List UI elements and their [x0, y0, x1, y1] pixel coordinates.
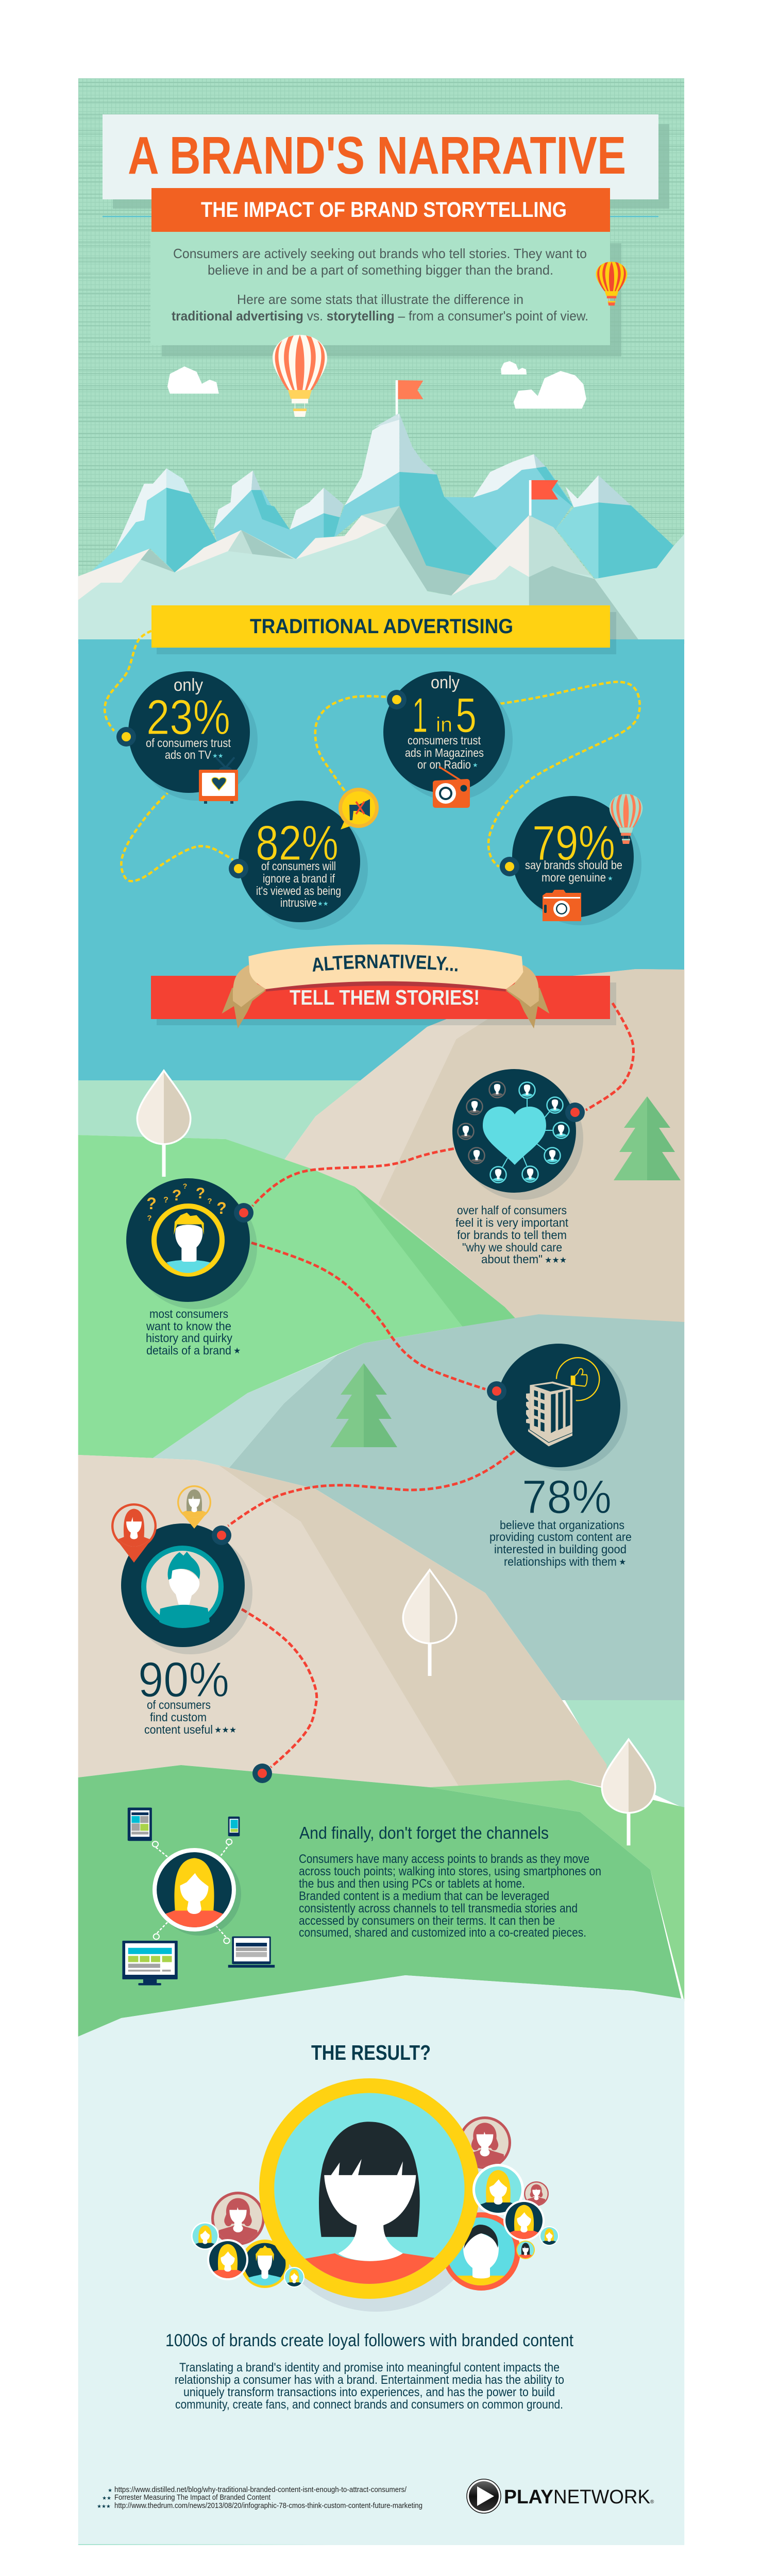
footnotes: ★★: [102, 2496, 111, 2501]
stat: most consumers: [126, 1178, 257, 1357]
icon: play button: [467, 2479, 501, 2513]
channels paragraph: Consumers have many access points to brands as they move: [299, 1852, 589, 1866]
route end marker: [252, 1764, 272, 1783]
ribbon: alternatively: [222, 944, 549, 1028]
result paragraph: uniquely transform transactions into experiences, and has the power to build: [183, 2385, 555, 2399]
stat: 79 percent: more genuine: [542, 871, 606, 884]
heading bar: traditional advertising: TRADITIONAL ADVERTISING: [250, 615, 513, 638]
heading bar: tell them stories: [151, 976, 616, 1025]
avatar: right cyan: [472, 2164, 524, 2215]
stat: 82 percent: ★★: [317, 900, 329, 907]
stat: most consumers: history and quirky: [146, 1331, 232, 1345]
stat: most consumers: ★: [233, 1347, 241, 1355]
title card: [103, 114, 658, 199]
ribbon: alternatively: ALTERNATIVELY...: [312, 954, 458, 972]
big circle: [259, 2078, 480, 2299]
channels paragraph: consistently across channels to tell transmedia stories and: [299, 1902, 578, 1916]
cloud right: [514, 371, 586, 409]
stat: 1 in 5: ads in Magazines: [405, 746, 484, 759]
avatar: lower right large: [442, 2212, 520, 2291]
result paragraph: community, create fans, and connect brands and consumers on common ground.: [175, 2398, 563, 2412]
stat: 78 percent: [487, 1344, 632, 1568]
panel: traditional advertising background: [78, 639, 684, 1088]
avatar: left dark: [207, 2239, 248, 2280]
stat: 82 percent: it's viewed as being: [256, 884, 341, 897]
avatar: left rose: [211, 2192, 265, 2245]
intro panel: [150, 232, 610, 345]
logo: PlayNetwork: [467, 2479, 654, 2513]
icon: monitor: [122, 1941, 178, 1986]
channels heading: And finally, don't forget the channels: [299, 1823, 549, 1842]
footnotes: http://www.thedrum.com/news/2013/08/20/infographic-78-cmos-think-custom-content-future-marketing: [114, 2501, 422, 2510]
icon: question marks: [146, 1182, 227, 1223]
stat: 90 percent: of consumers: [147, 1698, 211, 1711]
stat: over half of consumers: "why we should care: [462, 1241, 562, 1254]
intro text: Consumers are actively seeking out brands who tell stories. They want to: [173, 246, 587, 261]
stat: 1 in 5: or on Radio: [417, 758, 471, 771]
channels paragraph: consumed, shared and customized into a co-created pieces.: [299, 1926, 586, 1940]
icon: building with thumbs up: [526, 1358, 599, 1446]
stat: 23 percent: ★★: [212, 752, 224, 759]
intro text: believe in and be a part of something bigger than the brand.: [208, 262, 553, 278]
result heading: THE RESULT?: [311, 2041, 431, 2064]
icon: question marks: ?: [163, 1196, 168, 1205]
result heading line: 1000s of brands create loyal followers with branded content: [165, 2331, 573, 2350]
avatar: tiny yellow ring: [516, 2241, 535, 2259]
channels paragraph: the bus and then using PCs or tablets at home.: [299, 1877, 525, 1891]
icon: question marks: ?: [207, 1197, 212, 1206]
channels paragraph: [299, 1852, 601, 1940]
result paragraph: relationship a consumer has with a brand. Entertainment media has the ability to: [175, 2373, 564, 2387]
logo: PlayNetwork: NETWORK: [553, 2486, 650, 2508]
landscape background: [78, 969, 684, 2545]
channels paragraph: accessed by consumers on their terms. It can then be: [299, 1914, 555, 1928]
icon: tv: [199, 757, 238, 804]
icon: laptop: [228, 1936, 275, 1968]
result: community illustration: [191, 2078, 559, 2312]
tree: pine two: [330, 1363, 397, 1447]
avatar: lower small cyan: [284, 2267, 305, 2287]
stat: 1 in 5: consumers trust: [408, 734, 481, 747]
stat: 82 percent: [229, 788, 379, 930]
stat: over half of consumers: over half of consumers: [457, 1204, 567, 1217]
avatar: right dark: [503, 2200, 545, 2241]
stat: 78 percent: providing custom content are: [489, 1530, 632, 1544]
icon: large balloon: [273, 335, 327, 417]
stat: 90 percent: ★★★: [214, 1726, 236, 1735]
stat: 90 percent: find custom: [150, 1710, 207, 1724]
big person: [274, 2093, 464, 2289]
stat: most consumers: details of a brand: [146, 1344, 231, 1357]
icon: radio: [433, 767, 470, 808]
stat: 82 percent: 82%: [256, 816, 339, 871]
stat: over half of consumers: feel it is very important: [455, 1216, 569, 1229]
tree: leaf one: [138, 1072, 190, 1177]
stat: 82 percent: intrusive: [280, 896, 317, 909]
icon: yellow map pin: [177, 1485, 211, 1529]
stat: 82 percent: of consumers will: [261, 859, 336, 873]
footnotes: [97, 2485, 422, 2510]
footnotes: Forrester Measuring The Impact of Branded Content: [114, 2493, 271, 2502]
stat: over half of consumers: for brands to tell them: [457, 1228, 567, 1242]
stat: 1 in 5: 5: [455, 688, 477, 743]
bottom edge highlight: [78, 2544, 331, 2545]
result paragraph: [175, 2361, 564, 2412]
stat: 78 percent: ★: [619, 1558, 626, 1567]
heading bar: tell them stories: TELL THEM STORIES!: [290, 986, 480, 1009]
result text: [165, 2331, 573, 2412]
icon: central person: [153, 1848, 236, 1931]
icon: muted megaphone bubble: [339, 788, 379, 829]
shadow behind channel avatar: [158, 1852, 241, 1936]
stat: 23 percent: 23%: [146, 690, 230, 745]
icon: question marks: ?: [146, 1194, 157, 1213]
stat: 78 percent: 78%: [522, 1471, 612, 1523]
stat: 1 in 5: 1: [412, 688, 428, 743]
stat: most consumers: most consumers: [149, 1307, 228, 1320]
cloud left: [167, 366, 219, 394]
stat: 79 percent: ★: [607, 875, 613, 882]
flag on main peak: [396, 380, 423, 415]
stat: over half of consumers: about them": [481, 1252, 543, 1266]
avatar: left small cyan: [191, 2222, 219, 2250]
icon: camera: [543, 890, 581, 921]
icon: balloon: [610, 794, 642, 844]
avatar: small cyan right: [539, 2226, 559, 2246]
panel: sky background: [78, 78, 684, 645]
result paragraph: Translating a brand's identity and promise into meaningful content impacts the: [179, 2361, 560, 2375]
flag on front peak: [529, 480, 558, 516]
intro text: Here are some stats that illustrate the difference in: [237, 292, 523, 307]
channels paragraph: Branded content is a medium that can be leveraged: [299, 1889, 549, 1903]
channels: devices network: [122, 1807, 275, 1986]
logo: PlayNetwork: PLAY: [504, 2486, 553, 2508]
stat: 1 in 5: [383, 671, 513, 808]
icon: small balloon: [596, 262, 627, 306]
avatar: small rose: [524, 2181, 549, 2206]
channels text: [299, 1823, 601, 1940]
footnotes: ★★★: [97, 2504, 111, 2510]
yellow dashed route: [105, 631, 640, 881]
stat: 23 percent: [116, 671, 258, 804]
subtitle bar: THE IMPACT OF BRAND STORYTELLING: [201, 197, 567, 222]
tree: leaf three: [603, 1741, 654, 1845]
stat: 23 percent: of consumers trust: [146, 736, 231, 750]
stat: 23 percent: only: [174, 675, 203, 695]
title: A BRAND'S NARRATIVE: [128, 126, 626, 185]
icon: person with teal ring: [144, 1548, 221, 1628]
stat: most consumers: want to know the: [146, 1319, 231, 1333]
tree: pine one: [614, 1096, 681, 1180]
stat: 1 in 5: ★: [472, 761, 478, 769]
icon: phone: [228, 1817, 240, 1836]
stat: 79 percent: [500, 794, 642, 925]
icon: question marks: ?: [172, 1187, 181, 1204]
title card shadow: [113, 124, 669, 209]
divider line: [103, 216, 658, 217]
stat: 78 percent: relationships with them: [504, 1555, 617, 1568]
intro box shadow: [162, 243, 621, 357]
stat: over half of consumers: ★★★: [545, 1256, 567, 1265]
avatar: left yellow ring: [241, 2240, 289, 2288]
stat: 90 percent: [111, 1485, 252, 1736]
stat: 78 percent: interested in building good: [494, 1543, 627, 1556]
stat: 78 percent: believe that organizations: [500, 1518, 624, 1532]
stat: over half of consumers: [452, 1069, 585, 1266]
icon: question marks: ?: [216, 1199, 227, 1217]
stat: 82 percent: ignore a brand if: [263, 872, 335, 885]
stat: 90 percent: 90%: [138, 1652, 229, 1707]
red dashed route: [251, 1003, 634, 1389]
icon: tablet: [128, 1807, 152, 1841]
footnotes: https://www.distilled.net/blog/why-traditional-branded-content-isnt-enough-to-attract-consumers/: [114, 2485, 407, 2494]
stat: 79 percent: say brands should be: [525, 858, 622, 872]
intro text: [172, 246, 588, 324]
cloud small: [501, 361, 527, 375]
stat: 79 percent: 79%: [532, 816, 615, 871]
channels paragraph: across touch points; walking into stores, using smartphones on: [299, 1865, 601, 1878]
icon: question marks: ?: [147, 1214, 152, 1223]
mountains illustration: [78, 361, 684, 644]
intro text: traditional advertising vs. storytelling – from a consumer's point of view.: [172, 308, 588, 324]
stat: 23 percent: ads on TV: [165, 748, 212, 761]
footnotes: ★: [108, 2488, 112, 2494]
stat: 1 in 5: only: [431, 673, 460, 692]
icon: red map pin: [111, 1503, 157, 1563]
stat: 1 in 5: in: [436, 714, 452, 736]
subtitle bar: [151, 188, 610, 232]
logo: PlayNetwork: ®: [650, 2499, 654, 2505]
icon: question marks: ?: [183, 1182, 187, 1190]
icon: question marks: ?: [196, 1185, 205, 1202]
tree: leaf two: [404, 1571, 455, 1676]
icon: person with yellow ring: [154, 1206, 222, 1274]
red dashed route lower: [228, 1451, 515, 1767]
stat: 90 percent: content useful: [144, 1723, 213, 1736]
icon: heart network: [458, 1082, 569, 1183]
avatar: top right: [459, 2116, 511, 2169]
heading bar: traditional advertising: [151, 605, 616, 654]
